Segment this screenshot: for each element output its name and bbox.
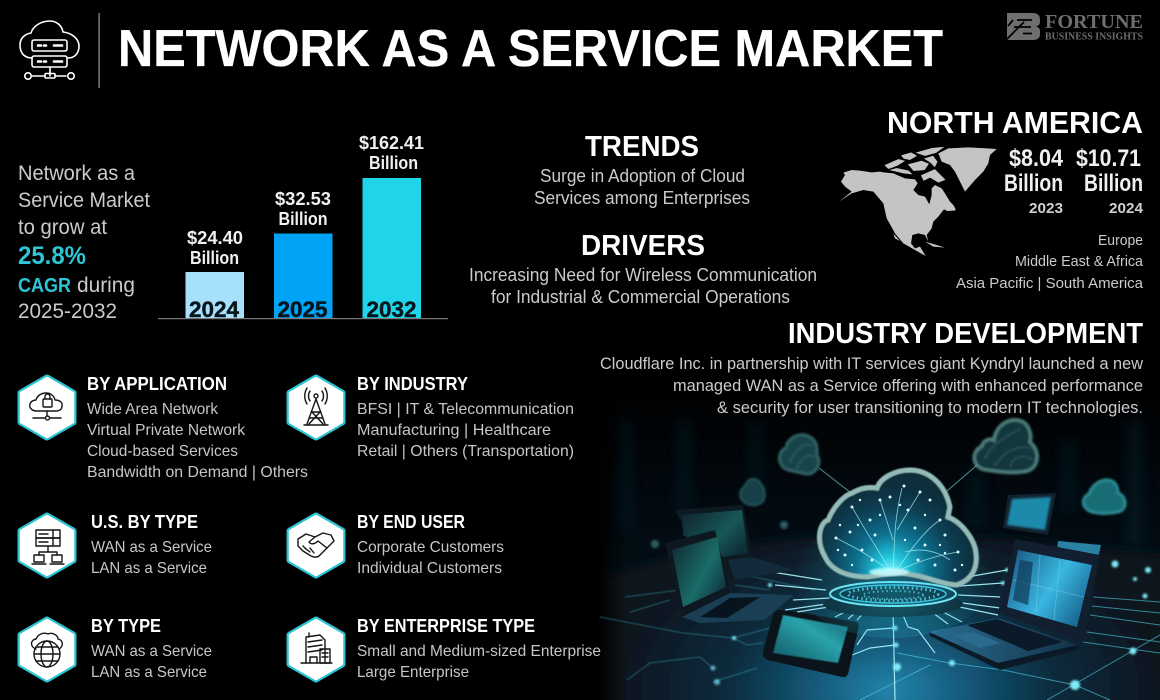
main glowing cloud (819, 470, 976, 585)
segment: by type: WAN as a Service (91, 643, 212, 660)
segment: by enterprise type: BY ENTERPRISE TYPE (357, 616, 535, 636)
segment: by application: Cloud-based Services (87, 443, 238, 460)
market growth text: CAGR (18, 275, 71, 297)
North America values: $8.04 (1009, 145, 1064, 172)
trends: Services among Enterprises (534, 188, 750, 208)
icon: servers and laptops (21, 516, 73, 575)
laptop: front right (929, 539, 1101, 670)
other regions: Asia Pacific | South America (956, 275, 1144, 292)
trends: Surge in Adoption of Cloud (540, 166, 745, 186)
segment: by industry: BFSI | IT & Telecommunication (357, 401, 574, 418)
segment: by enterprise type: Large Enterprise (357, 664, 469, 681)
industry development: managed WAN as a Service offering with enhanced performance (673, 376, 1143, 395)
industry development: Cloudflare Inc. in partnership with IT services giant Kyndryl launched a new (600, 354, 1144, 373)
circuit lines (600, 575, 815, 682)
bar 2032 (359, 133, 424, 322)
other regions: Europe (1098, 232, 1143, 249)
segment: by application: BY APPLICATION (87, 374, 227, 394)
drivers: Increasing Need for Wireless Communication (469, 265, 817, 285)
bar 2024: 2024 (189, 297, 240, 322)
bar 2024 (186, 228, 244, 322)
logo: Fortune Business Insights: FORTUNE (1045, 11, 1143, 33)
segment: by enterprise type (290, 616, 601, 681)
segment: U.S. by type: WAN as a Service (91, 539, 212, 556)
icon: handshake (290, 516, 342, 575)
laptop: front left (665, 530, 793, 623)
drivers (469, 230, 817, 307)
market growth text (18, 161, 150, 323)
North America heading: NORTH AMERICA (887, 105, 1143, 140)
segment: by industry (290, 374, 574, 460)
small clouds (740, 420, 1125, 514)
bar chart: market size (158, 133, 448, 322)
market growth text: 25.8% (18, 242, 86, 270)
laptop: back left (675, 505, 795, 581)
map: North America (839, 146, 997, 256)
other regions: Middle East & Africa (1015, 253, 1144, 270)
market growth text: to grow at (18, 215, 107, 239)
bar 2032: 2032 (366, 297, 416, 322)
logo: Fortune Business Insights (1006, 11, 1143, 42)
segment: by application: Virtual Private Network (87, 422, 246, 439)
North America values: 2024 (1109, 200, 1144, 217)
segment: by end user (290, 512, 504, 577)
North America values: Billion (1084, 170, 1143, 197)
industry development (600, 318, 1144, 417)
market growth text: Service Market (18, 188, 150, 212)
North America values: Billion (1004, 170, 1063, 197)
hero image: cloud network with laptops (600, 416, 1160, 700)
segment: by industry: Retail | Others (Transportation) (357, 443, 574, 460)
segment: by enterprise type: Small and Medium-sized Enterprise (357, 643, 601, 660)
market growth text: Network as a (18, 161, 135, 185)
bar 2025: $32.53 (275, 189, 331, 209)
logo: Fortune Business Insights: BUSINESS INSIGHTS (1045, 32, 1143, 42)
segment: by application: Wide Area Network (87, 401, 219, 418)
market growth text: during (77, 273, 135, 297)
segment: U.S. by type: LAN as a Service (91, 560, 207, 577)
segment: by type (21, 616, 212, 681)
icon: office buildings (290, 620, 342, 679)
segment: by end user: Corporate Customers (357, 539, 504, 556)
header divider (98, 13, 100, 88)
title: NETWORK AS A SERVICE MARKET (118, 20, 943, 78)
North America values: $10.71 (1076, 145, 1141, 172)
drivers: DRIVERS (581, 230, 705, 262)
bar 2025: 2025 (278, 297, 328, 322)
laptop: back right (1003, 493, 1056, 535)
bar 2025 (274, 189, 332, 322)
segment: U.S. by type: U.S. BY TYPE (91, 512, 198, 532)
segment: by application: Bandwidth on Demand | Others (87, 464, 308, 481)
bar 2025: Billion (278, 209, 328, 229)
other regions (956, 232, 1144, 292)
tablet (763, 610, 859, 677)
bar 2024: Billion (190, 248, 239, 268)
market growth text: 2025-2032 (18, 299, 117, 323)
pedestal (823, 582, 963, 617)
segment: by type: BY TYPE (91, 616, 161, 636)
icon: telecom tower (290, 378, 342, 437)
bar 2032: Billion (369, 153, 418, 173)
header icon: cloud server network (20, 21, 79, 79)
drivers: for Industrial & Commercial Operations (491, 287, 790, 307)
segment: by industry: Manufacturing | Healthcare (357, 422, 551, 439)
industry development: & security for user transitioning to modern IT technologies. (717, 398, 1143, 417)
bar 2024: $24.40 (187, 228, 243, 248)
segment: by application (21, 374, 308, 481)
segment: by type: LAN as a Service (91, 664, 207, 681)
segment: U.S. by type (21, 512, 212, 577)
North America values (1004, 145, 1144, 217)
segment: by end user: Individual Customers (357, 560, 502, 577)
segment: by industry: BY INDUSTRY (357, 374, 468, 394)
icon: cloud lock (21, 378, 73, 437)
trends: TRENDS (585, 131, 699, 163)
industry development: INDUSTRY DEVELOPMENT (788, 318, 1143, 350)
bar 2032: $162.41 (359, 133, 424, 153)
segment: by end user: BY END USER (357, 512, 465, 532)
icon: globe cloud (21, 620, 73, 679)
trends (534, 131, 750, 208)
connector lines (819, 465, 977, 493)
North America values: 2023 (1029, 200, 1063, 217)
